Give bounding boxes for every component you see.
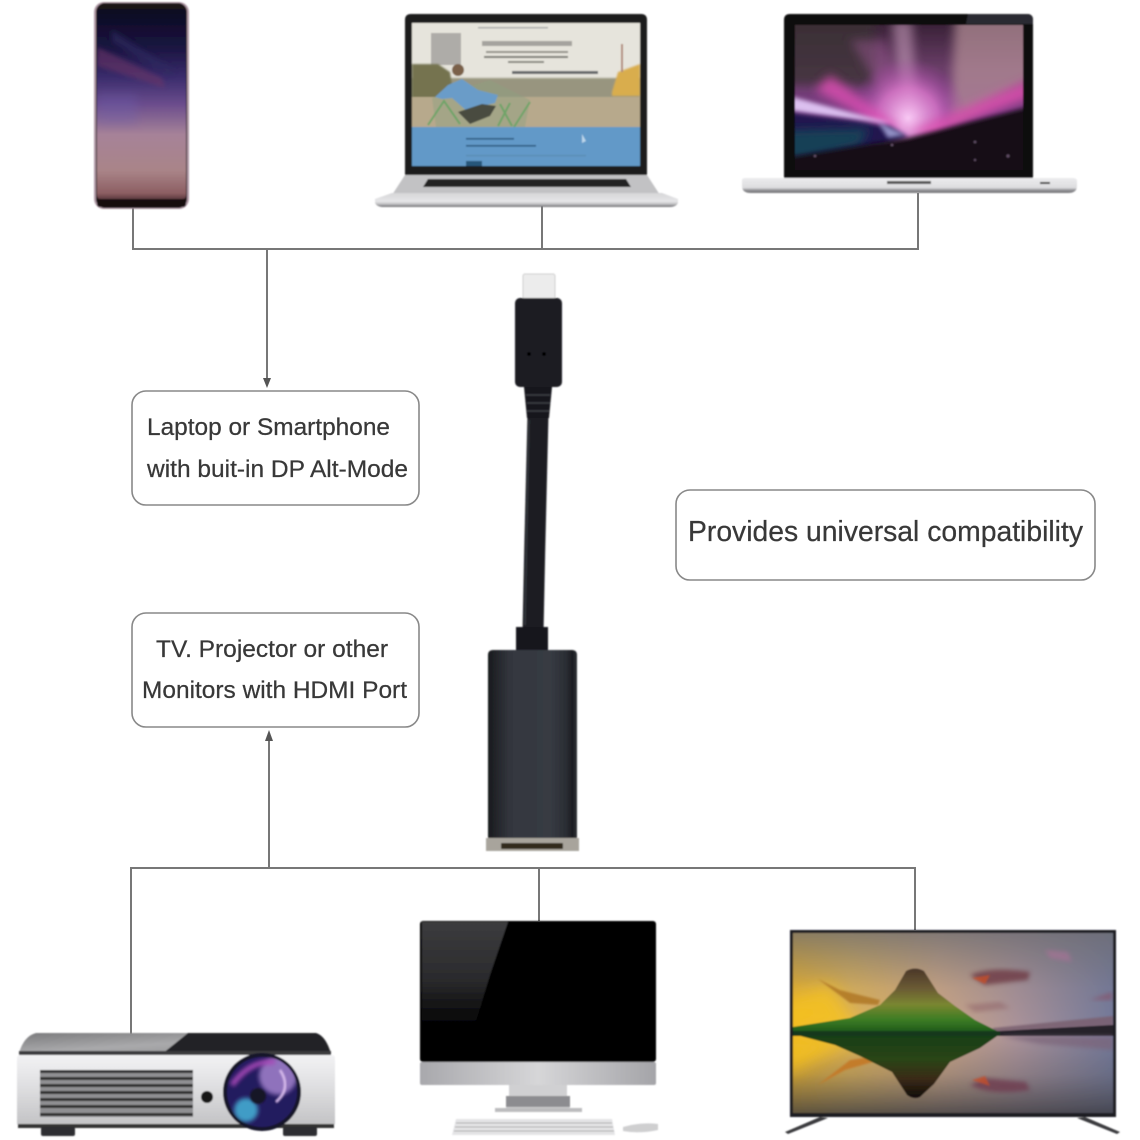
icon: laptop with aurora screen xyxy=(742,14,1077,193)
icon: USB-C to HDMI adapter xyxy=(486,274,579,851)
panel: compatibility: Provides universal compatibility xyxy=(688,516,1083,548)
arrow: down to source box xyxy=(263,378,271,388)
top connector lines xyxy=(133,193,918,380)
icon: projector xyxy=(17,1033,335,1136)
icon: laptop with website xyxy=(375,14,678,207)
icon: television with mountain xyxy=(783,930,1120,1134)
icon: smartphone xyxy=(94,2,189,209)
panel: source devices: with buit-in DP Alt-Mode xyxy=(146,456,408,483)
panel: display devices: Monitors with HDMI Port xyxy=(142,677,407,704)
panel: compatibility xyxy=(676,490,1095,580)
icon: desktop monitor xyxy=(420,921,658,1135)
panel: source devices: Laptop or Smartphone xyxy=(147,414,390,441)
panel: source devices xyxy=(132,391,419,505)
arrow: up to display box xyxy=(265,730,273,741)
panel: display devices xyxy=(132,613,419,727)
bottom connector lines xyxy=(131,740,915,1034)
panel: display devices: TV. Projector or other xyxy=(156,636,388,663)
